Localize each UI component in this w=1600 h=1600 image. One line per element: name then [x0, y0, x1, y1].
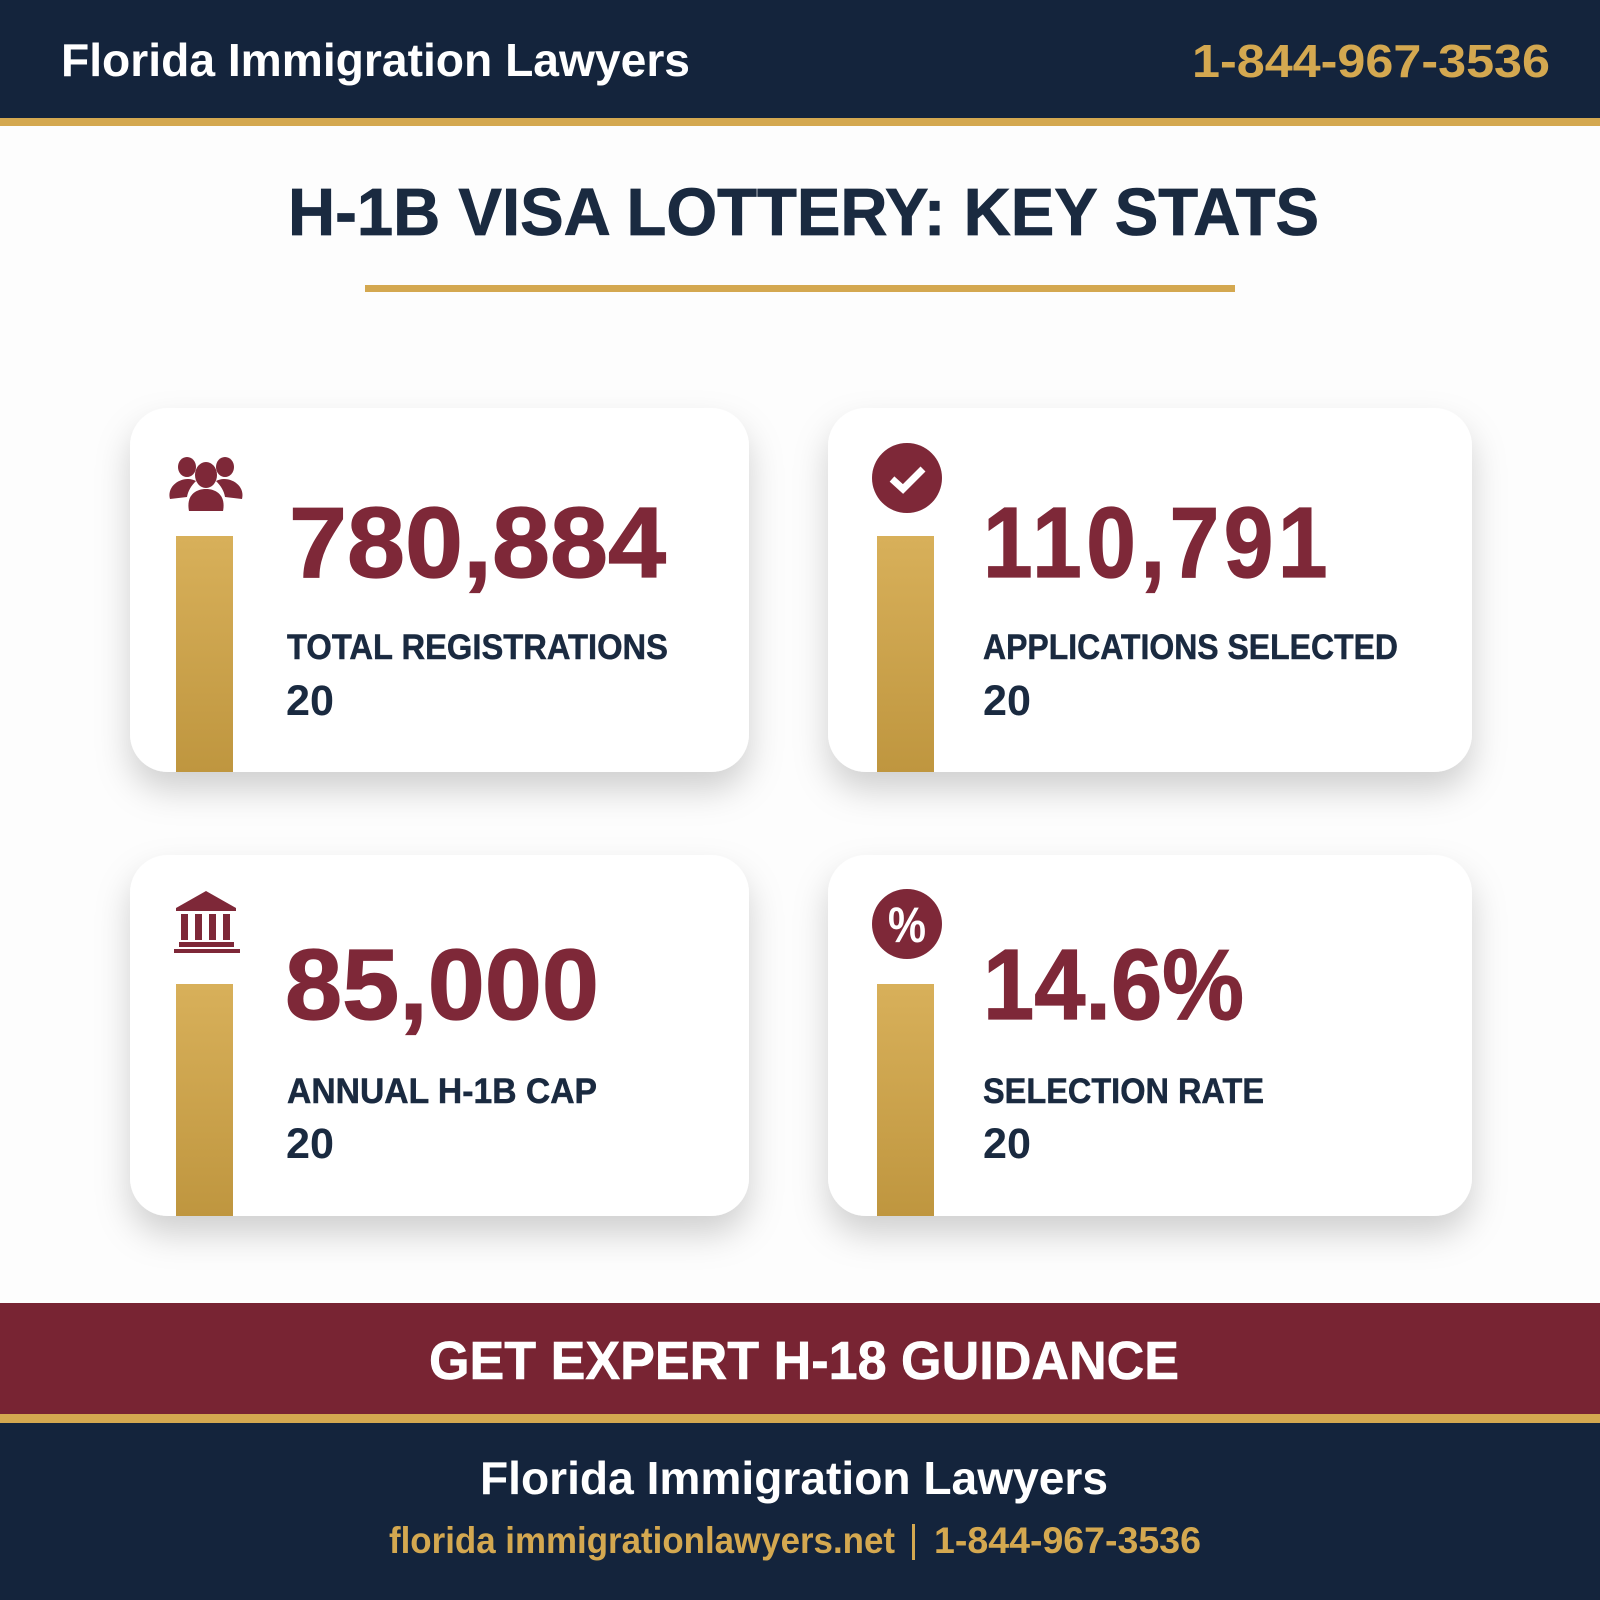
icon: percent circle: %	[888, 897, 926, 953]
panel: total registrations	[130, 408, 749, 772]
gold bar	[877, 984, 934, 1216]
icon: people group	[169, 457, 243, 511]
footer firm name: Florida Immigration Lawyers	[480, 1452, 1108, 1504]
header bar	[0, 0, 1600, 126]
gold divider	[0, 1414, 1600, 1423]
header phone number: 1-844-967-3536	[1192, 35, 1550, 87]
icon: government building	[174, 891, 240, 953]
stat value: 14.6%	[983, 929, 1244, 1041]
panel: applications selected	[828, 408, 1472, 772]
footer website: florida immigrationlawyers.net	[389, 1520, 895, 1561]
stat label: APPLICATIONS SELECTED	[983, 628, 1398, 667]
header firm name: Florida Immigration Lawyers	[61, 34, 690, 86]
title underline	[365, 285, 1235, 292]
gold bar	[877, 536, 934, 772]
year fragment: 20	[983, 677, 1031, 725]
stat value: 110,791	[983, 487, 1332, 599]
panel: annual cap	[130, 855, 749, 1216]
gold bar	[176, 536, 233, 772]
year fragment: 20	[983, 1120, 1031, 1168]
panel: selection rate	[828, 855, 1472, 1216]
stat value: 85,000	[285, 929, 599, 1041]
stat value: 780,884	[289, 487, 666, 599]
stat label: ANNUAL H-1B CAP	[287, 1072, 597, 1111]
footer	[0, 1423, 1600, 1600]
stat label: SELECTION RATE	[983, 1072, 1264, 1111]
icon: percent circle	[872, 889, 942, 959]
call-to-action banner	[0, 1303, 1600, 1414]
year fragment: 20	[286, 1120, 334, 1168]
year fragment: 20	[286, 677, 334, 725]
footer separator	[912, 1524, 915, 1560]
footer phone: 1-844-967-3536	[934, 1520, 1201, 1561]
gold bar	[176, 984, 233, 1216]
icon: check circle	[872, 443, 942, 513]
banner text: GET EXPERT H-18 GUIDANCE	[429, 1331, 1179, 1391]
stat label: TOTAL REGISTRATIONS	[287, 628, 668, 667]
title: H-1B VISA LOTTERY: KEY STATS	[288, 175, 1319, 250]
